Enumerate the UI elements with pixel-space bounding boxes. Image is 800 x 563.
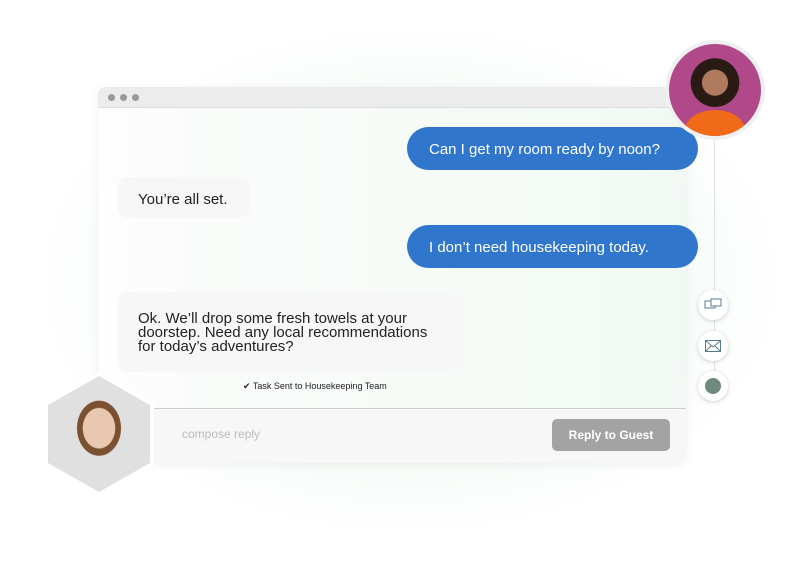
guest bubble 2: I don’t need housekeeping today.: [429, 239, 649, 256]
task status: ✔ Task Sent to Housekeeping Team: [243, 381, 387, 391]
agent bubble 1: [118, 177, 250, 218]
agent bubble 2: Ok. We’ll drop some fresh towels at your: [138, 310, 407, 327]
chat window: [98, 87, 686, 463]
compose area: [98, 408, 686, 464]
agent avatar hexagon: [44, 372, 154, 496]
agent bubble 2: for today’s adventures?: [138, 338, 294, 355]
guest avatar: [665, 40, 765, 140]
icon: whatsapp: [698, 371, 728, 401]
reply button: Reply to Guest: [569, 428, 653, 442]
connector line: [714, 137, 715, 397]
agent bubble 2: doorstep. Need any local recommendations: [138, 324, 427, 341]
guest bubble 1: [407, 127, 698, 170]
guest bubble 2: [407, 225, 698, 268]
icon: chat: [698, 290, 728, 320]
reply button: [552, 419, 670, 451]
compose area: compose reply: [182, 427, 260, 441]
icon: email: [698, 331, 728, 361]
agent bubble 2: [118, 292, 460, 372]
guest bubble 1: Can I get my room ready by noon?: [429, 141, 660, 158]
title bar: [98, 87, 686, 108]
agent bubble 1: You’re all set.: [138, 191, 228, 208]
